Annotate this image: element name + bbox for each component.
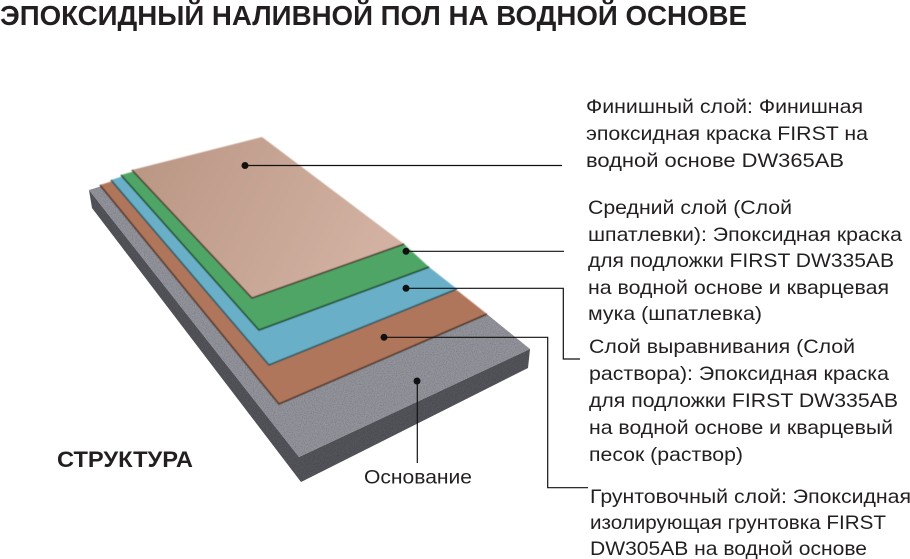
text: levelling layer: песок (раствор) (589, 444, 743, 466)
leader: levelling blue layer (402, 285, 580, 359)
layer: levelling (100, 178, 487, 404)
layer: finish beige (132, 137, 404, 298)
leader: primer brown layer (380, 334, 588, 488)
layer: concrete base (89, 183, 530, 482)
text: middle layer: для подложки FIRST DW335AB (588, 250, 894, 272)
text: middle layer: шпатлевки): Эпоксидная краска (588, 224, 902, 246)
text: levelling layer (589, 336, 898, 466)
text: primer layer: Грунтовочный слой: Эпоксидная (590, 486, 910, 508)
text: middle layer: мука (шпатлевка) (588, 303, 762, 325)
layer: primer blue (111, 173, 457, 365)
text: finish layer: водной основе DW365AB (586, 150, 844, 172)
text: middle layer (588, 197, 902, 325)
title: ЭПОКСИДНЫЙ НАЛИВНОЙ ПОЛ НА ВОДНОЙ ОСНОВЕ (0, 0, 747, 31)
text: levelling layer: Слой выравнивания (Слой (589, 336, 855, 358)
text: levelling layer: раствора): Эпоксидная краска (589, 363, 889, 385)
floor layers diagram (89, 137, 530, 482)
heading: structure: СТРУКТУРА (57, 447, 193, 472)
text: finish layer (586, 96, 868, 172)
leader: finish layer (242, 162, 562, 169)
text: middle layer: Средний слой (Слой (588, 197, 792, 219)
text: primer layer (590, 486, 910, 559)
leader: base (414, 378, 420, 463)
label: base: Основание (364, 466, 472, 488)
text: primer layer: изолирующая грунтовка FIRST (590, 512, 886, 534)
layer: middle green (121, 169, 429, 330)
text: levelling layer: для подложки FIRST DW335AB (589, 390, 898, 412)
leader: middle layer (402, 248, 564, 255)
text: middle layer: на водной основе и кварцевая (588, 277, 889, 299)
text: finish layer: Финишный слой: Финишная (586, 96, 863, 118)
text: finish layer: эпоксидная краска FIRST на (586, 123, 868, 145)
text: levelling layer: на водной основе и кварцевый (589, 417, 893, 439)
